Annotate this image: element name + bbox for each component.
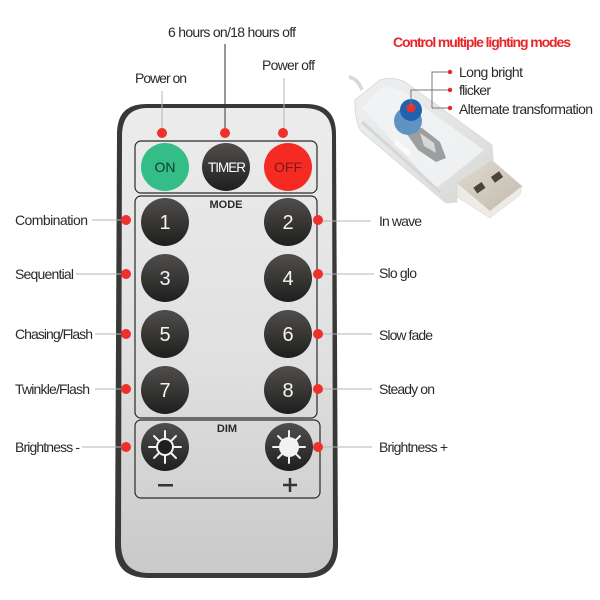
callout: brightness minus: Brightness - [15,439,80,455]
transparent housing [355,78,493,203]
minus sign [158,484,173,486]
callout: flicker: flicker [459,82,491,98]
callout: brightness plus [313,439,448,455]
button 4: 4 [282,268,294,290]
button: OFF: OFF [274,159,302,175]
callout: brightness plus: Brightness + [379,439,448,455]
button 1 [141,198,189,246]
button 3: 3 [159,268,171,290]
callout: long bright: Long bright [459,64,523,80]
panel: power buttons [135,141,317,193]
blue button [394,107,422,135]
callout: in wave [313,213,422,229]
button 1: 1 [159,212,171,234]
callout: slo glo [313,265,417,281]
button: TIMER: TIMER [208,160,246,175]
inner circuit [404,128,446,162]
button: TIMER [202,143,250,191]
button 6 [264,310,312,358]
callout: power on: Power on [135,70,187,86]
callout: twinkle/flash: Twinkle/Flash [15,381,90,397]
callout: twinkle/flash [15,381,131,397]
callout: steady on [313,381,435,397]
plus sign [283,478,297,492]
callout: timer: 6 hours on/18 hours off [168,24,296,40]
callout: alternate transformation: Alternate transformation [459,101,593,117]
icon: brightness minus [141,423,189,471]
callout: combination [15,212,131,228]
callout: slo glo: Slo glo [379,265,417,281]
panel: mode buttons [135,196,317,418]
callout: in wave: In wave [379,213,422,229]
button: ON [141,143,189,191]
usb controller illustration [349,77,522,218]
button 3 [141,254,189,302]
callout: long bright [432,64,523,108]
callout: slow fade: Slow fade [379,327,433,343]
button 5: 5 [159,324,171,346]
cable [349,77,362,90]
callout: brightness minus [15,439,131,455]
callout: slow fade [313,327,433,343]
mode heading: MODE [210,199,242,211]
button 6: 6 [282,324,294,346]
button 8 [264,366,312,414]
callout: sequential: Sequential [15,266,74,282]
usb heading: Control multiple lighting modes [393,34,571,50]
callout: flicker [411,82,491,108]
usb plug [457,160,522,218]
button 8: 8 [282,380,294,402]
button 7 [141,366,189,414]
button 5 [141,310,189,358]
callout: chasing/flash [15,326,131,342]
dim heading: DIM [217,423,237,435]
red dot on button [406,104,416,112]
callout: combination: Combination [15,212,88,228]
button 2 [264,198,312,246]
remote control body [115,104,338,578]
button: ON: ON [154,159,176,175]
button 4 [264,254,312,302]
callout: chasing/flash: Chasing/Flash [15,326,93,342]
button 2: 2 [282,212,294,234]
callout: steady on: Steady on [379,381,435,397]
callout: power off: Power off [262,57,315,73]
panel: dim buttons [135,420,320,498]
callout: timer [168,24,296,138]
button: OFF [264,143,312,191]
callout: power on [135,70,187,138]
callout: power off [262,57,315,138]
icon: brightness plus [265,423,313,471]
button 7: 7 [159,380,171,402]
callout: sequential [15,266,131,282]
